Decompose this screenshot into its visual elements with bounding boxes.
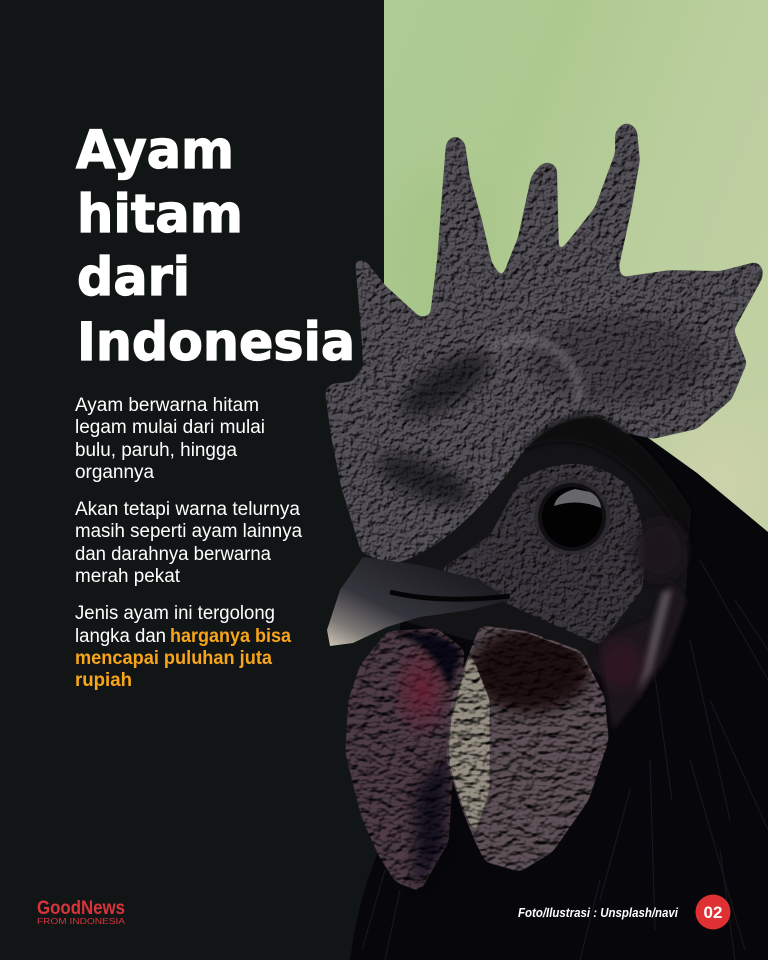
- head: [390, 418, 688, 700]
- title: dari: [77, 247, 190, 308]
- eye: [534, 479, 610, 555]
- right wattle: [446, 625, 609, 872]
- lower panel mask beside the chin: [384, 540, 768, 960]
- paragraph 3 with highlight: harganya bisa: [170, 626, 291, 647]
- logo: GoodNews from Indonesia: [37, 898, 125, 926]
- page number badge: [696, 894, 730, 930]
- paragraph 3 with highlight: [75, 603, 291, 691]
- page number badge: 02: [704, 903, 722, 922]
- paragraph 3 with highlight: Jenis ayam ini tergolong: [75, 603, 275, 624]
- paragraph 2: Akan tetapi warna telurnya: [75, 499, 300, 520]
- neck and body feathers: [350, 417, 768, 960]
- paragraph 1: organnya: [75, 462, 154, 483]
- title: [76, 120, 355, 373]
- logo: GoodNews from Indonesia: FROM INDONESIA: [37, 916, 125, 926]
- left black panel: [0, 0, 384, 960]
- paragraph 2: [75, 499, 302, 587]
- paragraph 3 with highlight: langka dan: [75, 626, 166, 647]
- ear lobe: [600, 580, 687, 730]
- paragraph 3 with highlight: mencapai puluhan juta: [75, 648, 272, 669]
- dark patch behind eye: [634, 520, 686, 580]
- paragraph 1: [75, 395, 265, 483]
- title: Indonesia: [77, 312, 355, 373]
- photo credit: Foto/Ilustrasi : Unsplash/navi: [518, 905, 678, 920]
- title: hitam: [77, 184, 243, 245]
- paragraph 1: legam mulai dari mulai: [75, 417, 265, 438]
- illustration: black rooster: [325, 123, 768, 960]
- title: Ayam: [76, 120, 234, 181]
- paragraph 3 with highlight: rupiah: [75, 670, 132, 691]
- comb shading: [372, 315, 710, 515]
- logo: GoodNews from Indonesia: GoodNews: [37, 898, 125, 919]
- background: blurred grass photo: [384, 0, 768, 532]
- left wattle: [345, 628, 465, 892]
- paragraph 2: dan darahnya berwarna: [75, 544, 271, 565]
- beak: [327, 557, 510, 646]
- paragraph 2: merah pekat: [75, 566, 181, 587]
- head feather crest: [520, 415, 692, 548]
- paragraph 1: Ayam berwarna hitam: [75, 395, 259, 416]
- comb: [325, 123, 763, 565]
- paragraph 1: bulu, paruh, hingga: [75, 440, 237, 461]
- paragraph 2: masih seperti ayam lainnya: [75, 521, 302, 542]
